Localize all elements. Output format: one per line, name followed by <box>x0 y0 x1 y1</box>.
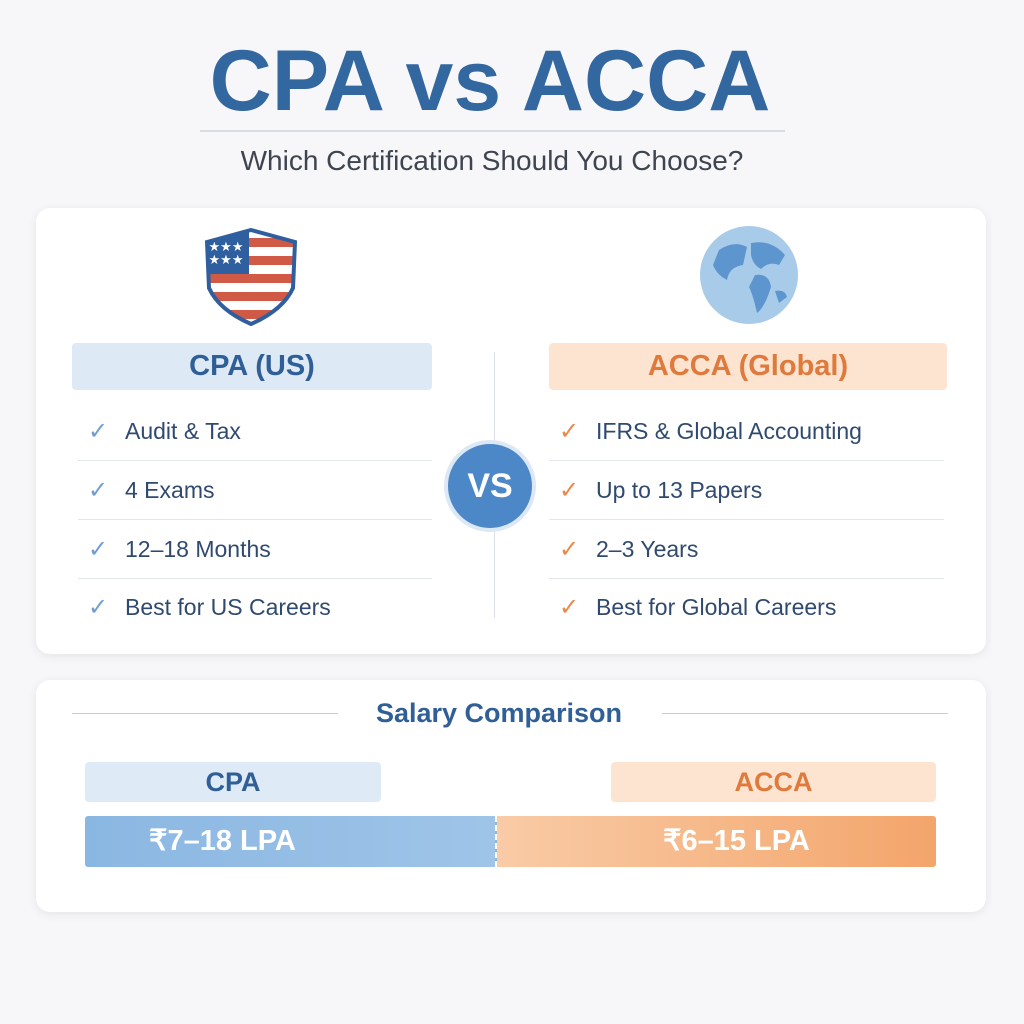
VS badge: VS <box>467 467 513 505</box>
icon: US shield: ★★★ <box>209 239 243 254</box>
CPA header: CPA (US) <box>189 350 315 382</box>
salary bar: ₹7–18 LPA <box>149 825 296 857</box>
CPA list: ✓ <box>88 536 108 562</box>
icon: globe <box>700 226 798 324</box>
CPA header <box>72 343 432 390</box>
subtitle: Which Certification Should You Choose? <box>241 145 743 176</box>
salary bar <box>85 816 936 867</box>
ACCA label: ACCA <box>734 767 812 797</box>
title: CPA vs ACCA <box>210 33 770 129</box>
CPA list: Best for US Careers <box>125 594 331 620</box>
CPA label: CPA <box>205 767 260 797</box>
ACCA list: ✓ <box>559 536 579 562</box>
ACCA header <box>549 343 947 390</box>
CPA label <box>85 762 381 802</box>
CPA list: 4 Exams <box>125 476 214 502</box>
ACCA list <box>549 418 944 620</box>
ACCA list: Best for Global Careers <box>596 594 836 620</box>
ACCA list: ✓ <box>559 418 579 444</box>
ACCA header: ACCA (Global) <box>648 350 848 382</box>
VS badge <box>444 440 536 532</box>
CPA list: ✓ <box>88 418 108 444</box>
panel: comparison <box>36 208 986 654</box>
ACCA list: ✓ <box>559 594 579 620</box>
CPA list: Audit & Tax <box>125 418 241 444</box>
CPA list <box>78 418 432 620</box>
ACCA list: IFRS & Global Accounting <box>596 418 862 444</box>
CPA list: ✓ <box>88 476 108 504</box>
icon: US shield: ★★★ <box>209 252 243 267</box>
salary bar: ₹6–15 LPA <box>663 825 810 857</box>
ACCA list: 2–3 Years <box>596 536 698 562</box>
ACCA label <box>611 762 936 802</box>
ACCA list: Up to 13 Papers <box>596 476 762 502</box>
panel: salary comparison <box>36 680 986 912</box>
CPA list: ✓ <box>88 594 108 620</box>
CPA list: 12–18 Months <box>125 536 271 562</box>
icon: US shield <box>204 228 298 326</box>
ACCA list: ✓ <box>559 476 579 504</box>
salary heading: Salary Comparison <box>376 698 622 728</box>
